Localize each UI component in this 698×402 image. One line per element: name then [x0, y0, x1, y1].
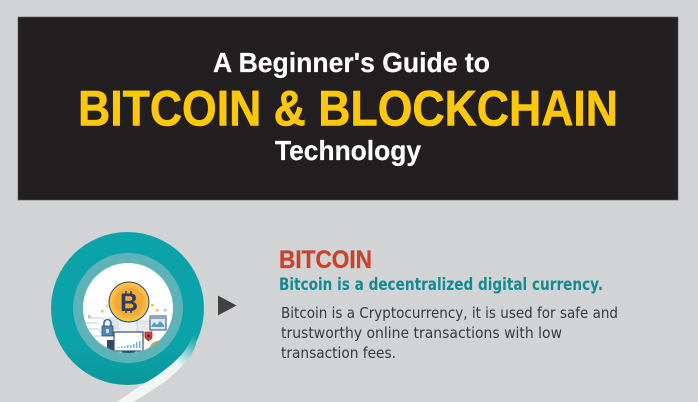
- sparkle dots: [88, 304, 166, 318]
- heading: BITCOIN: BITCOIN: [279, 246, 372, 274]
- body line 3: transaction fees.: [281, 344, 396, 362]
- bitcoin text block: [279, 246, 618, 362]
- title line: Technology: Technology: [275, 135, 421, 166]
- chart window: [150, 316, 166, 330]
- teal outer ring: [51, 232, 204, 385]
- coins pile: [150, 340, 159, 348]
- body line 1: Bitcoin is a Cryptocurrency, it is used for safe and: [281, 304, 618, 322]
- bitcoin badge: [51, 232, 204, 402]
- arrow pointing to text: [218, 296, 236, 314]
- technology illustration: [86, 282, 166, 353]
- title line: A Beginner's Guide to: A Beginner's Guide to: [213, 47, 490, 78]
- body line 2: trustworthy online transactions with low: [281, 324, 562, 342]
- monitor: [114, 332, 143, 353]
- white inner disc: [83, 263, 173, 353]
- header banner: [18, 17, 678, 200]
- middle ring: [73, 253, 183, 363]
- coin with bitcoin symbol: B: [120, 289, 138, 317]
- server box: [107, 340, 114, 352]
- subheading: Bitcoin is a decentralized digital currency.: [279, 275, 603, 295]
- shield: [145, 332, 152, 341]
- document panels: [118, 321, 138, 332]
- title line: BITCOIN & BLOCKCHAIN: BITCOIN & BLOCKCHAIN: [78, 80, 618, 136]
- padlock: [102, 320, 113, 336]
- white swoosh: [117, 331, 197, 402]
- circuit lines: [86, 318, 107, 336]
